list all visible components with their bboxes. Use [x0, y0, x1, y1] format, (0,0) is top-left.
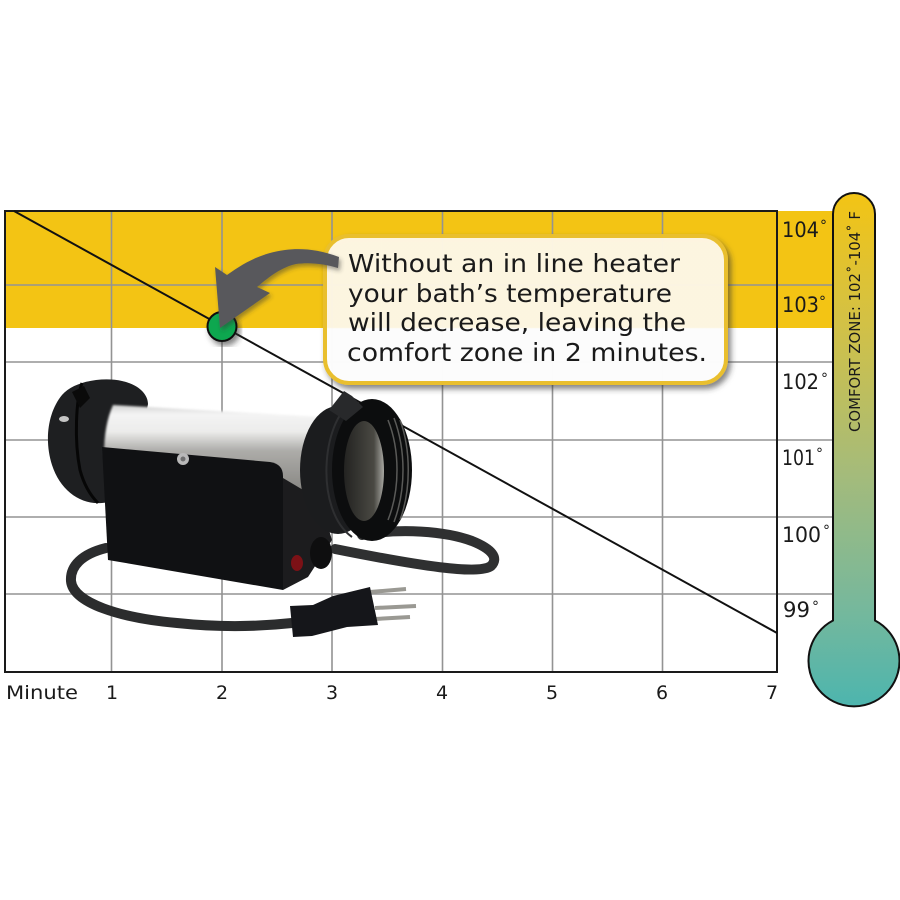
right collar: [300, 406, 376, 534]
heater product illustration: [48, 379, 494, 637]
x axis minute labels: 6: [656, 682, 668, 704]
steel body: [104, 405, 322, 500]
arrow pointing to marker: [215, 249, 339, 328]
callout text: your bath’s temperature: [348, 279, 672, 308]
thermometer label: COMFORT ZONE: 102˚-104˚ F: [846, 211, 864, 432]
x axis minute labels: Minute: [6, 682, 78, 704]
plug: [290, 587, 378, 637]
callout text: [347, 249, 707, 367]
temperature decline line: [14, 211, 777, 633]
marker: green dot at 2 minutes: [208, 312, 236, 341]
plug prongs: [370, 589, 416, 619]
x axis minute labels: [6, 682, 778, 704]
strain relief: [310, 537, 332, 569]
indicator light: [291, 555, 303, 571]
y axis temperature labels: °: [812, 599, 819, 615]
power cord: [71, 531, 494, 626]
y axis temperature labels: °: [816, 446, 823, 462]
y axis temperature labels: °: [823, 523, 830, 539]
grid lines: [5, 211, 833, 672]
y axis temperature labels: 104: [782, 218, 819, 242]
y axis temperature labels: 103: [782, 293, 819, 317]
y axis temperature labels: 100: [782, 523, 821, 547]
x axis minute labels: 2: [216, 682, 228, 704]
y axis temperature labels: °: [819, 294, 826, 310]
mounting screw: [177, 453, 189, 465]
x axis minute labels: 1: [106, 682, 118, 704]
y axis temperature labels: °: [820, 218, 827, 234]
y axis temperature labels: °: [821, 371, 828, 387]
x axis minute labels: 4: [436, 682, 448, 704]
callout text: comfort zone in 2 minutes.: [347, 338, 707, 367]
control box: [102, 447, 283, 590]
y axis temperature labels: [782, 218, 830, 622]
callout box: [325, 236, 726, 383]
x axis minute labels: 3: [326, 682, 338, 704]
collar threads: [388, 418, 408, 522]
left collar: [48, 379, 148, 503]
x axis minute labels: 5: [546, 682, 558, 704]
pipe opening: [344, 421, 384, 521]
thermometer: [809, 193, 900, 706]
y axis temperature labels: 99: [783, 598, 810, 622]
y axis temperature labels: 102: [782, 370, 819, 394]
chart frame: [5, 211, 777, 672]
callout text: will decrease, leaving the: [348, 308, 686, 337]
x axis minute labels: 7: [766, 682, 778, 704]
y axis temperature labels: 101: [782, 446, 815, 470]
callout text: Without an in line heater: [348, 249, 681, 278]
comfort zone band: [5, 211, 833, 328]
